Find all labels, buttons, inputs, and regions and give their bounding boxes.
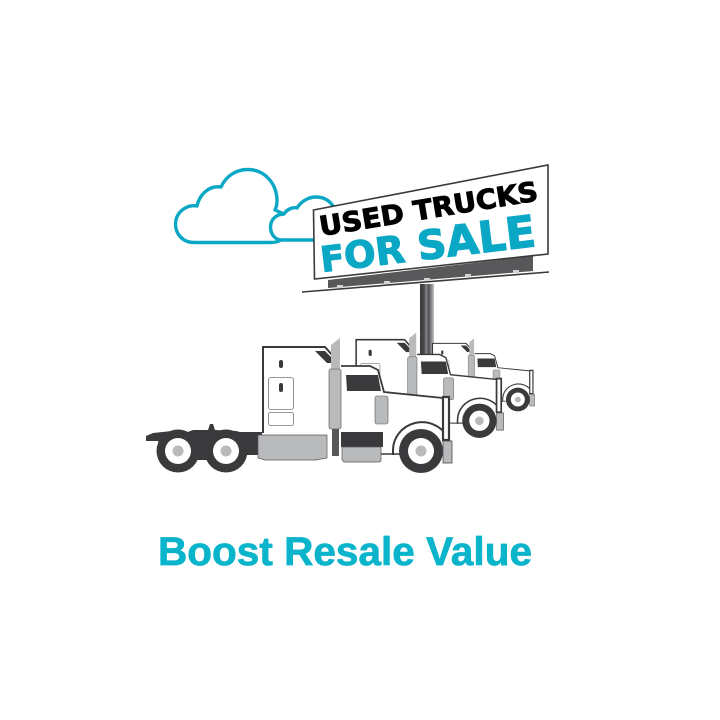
truck: front	[146, 338, 452, 473]
billboard support band	[328, 256, 533, 288]
icon: clouds	[176, 170, 340, 242]
truck: rear	[369, 339, 535, 411]
billboard	[302, 165, 549, 292]
icon: large cloud	[176, 170, 284, 242]
billboard headline: for sale: FOR SALE	[317, 206, 538, 283]
truck: middle	[265, 333, 504, 438]
billboard panel	[314, 165, 548, 279]
billboard headline: used trucks: USED TRUCKS	[317, 177, 540, 243]
billboard lights	[337, 270, 519, 288]
title: Boost Resale Value	[158, 530, 532, 574]
pole	[420, 284, 434, 356]
icon: small cloud	[270, 197, 340, 240]
billboard catwalk	[302, 272, 549, 292]
